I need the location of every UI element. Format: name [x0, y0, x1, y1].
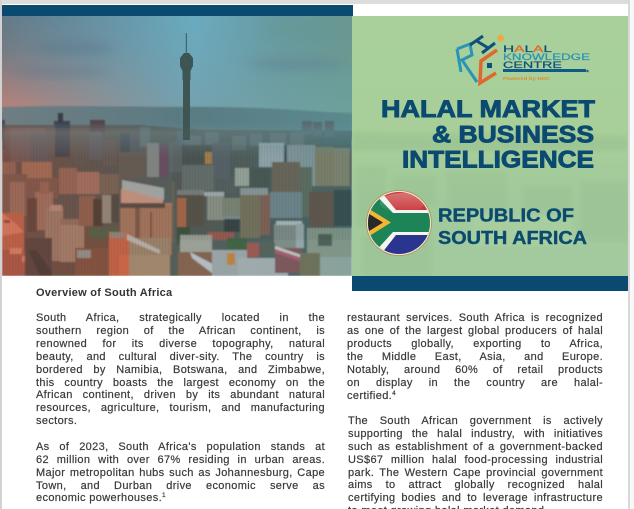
icon: Halal Knowledge Centre logo: Powered by HDC	[503, 76, 551, 81]
icon: Halal Knowledge Centre logo	[456, 34, 590, 86]
heading: Halal Market & Business Intelligence: INTELLIGENCE	[402, 146, 594, 174]
text block: left column: Town, and Durban drive economic serve as	[36, 480, 325, 492]
text block: right column: such as establishment of a government-backed	[348, 440, 603, 452]
bottom navy bar	[352, 276, 628, 291]
icon: South African flag badge	[366, 190, 432, 256]
text block: left column: economic powerhouses.1	[36, 492, 166, 504]
text block: right column: Notably, around 60% of retail products	[347, 364, 603, 376]
windows texture	[2, 135, 352, 276]
text block: left column: renowned for its diverse topography, natural	[36, 338, 325, 350]
text block: left column: sectors.	[36, 415, 77, 427]
text block: left column: this country boasts the largest economy on the	[36, 376, 325, 388]
text block: right column: supporting the halal industry, with initiatives	[348, 428, 603, 440]
text block: left column: beauty, and cultural diver-sity. The country is	[36, 351, 325, 363]
salmon mid rows	[2, 162, 16, 174]
text block: right column: aims to attract globally recognized halal	[348, 479, 603, 491]
distant blocks	[302, 121, 334, 137]
text block: left column: African continent, driven by its abundant natural	[36, 389, 325, 401]
heading: Halal Market & Business Intelligence: HALAL MARKET	[381, 96, 595, 123]
text block: right column: the Middle East, Asia, and Europe.	[347, 350, 603, 362]
panel: green title block	[352, 16, 628, 276]
text block: right column: restaurant services. South Africa is recognized	[347, 312, 603, 324]
text block: left column: 62 million with over 67% residing in urban areas.	[36, 454, 325, 466]
top navy bar	[2, 5, 353, 16]
text block: right column: products globally, exporting to Africa,	[347, 338, 603, 350]
centre upper	[177, 130, 185, 144]
right towers	[259, 143, 284, 167]
text block: left column: South Africa, strategically located in the	[36, 312, 325, 324]
text block: left column: Major metropolitan hubs such as Johannesburg, Cape	[36, 467, 325, 479]
icon: Halal Knowledge Centre logo: KNOWLEDGE	[503, 52, 590, 62]
heading: Overview of South Africa: Overview of South Africa	[36, 287, 172, 299]
text block: left column	[36, 312, 325, 504]
heading: Halal Market & Business Intelligence	[381, 96, 596, 174]
text block: right column: park. The Western Cape provincial government	[348, 466, 603, 478]
text block: left column: southern region of the African continent, is	[36, 325, 325, 337]
right mid	[177, 192, 204, 227]
text block: right column: US$67 million halal food-processing industrial	[348, 454, 603, 466]
central large building	[121, 189, 163, 212]
text block: right column: on display in the country are halal-	[347, 376, 603, 388]
heading: Republic of South Africa: SOUTH AFRICA	[438, 227, 587, 248]
heading: Republic of South Africa: REPUBLIC OF	[438, 204, 574, 226]
text block: right column: as one of the largest global producers of halal	[347, 324, 603, 336]
heading: Halal Market & Business Intelligence: & BUSINESS	[432, 122, 594, 148]
heading: Republic of South Africa	[438, 204, 587, 248]
hills	[2, 106, 352, 140]
bottom left	[2, 213, 24, 251]
colour tint	[2, 128, 352, 276]
towers left	[10, 128, 45, 162]
text block: right column: certified.4	[347, 390, 396, 402]
tower	[180, 33, 193, 140]
icon: Halal Knowledge Centre logo: H A L A L	[503, 44, 552, 54]
text block: left column: As of 2023, South Africa's population stands at	[36, 441, 325, 453]
text block: left column: bordered by Namibia, Botswana, and Zimbabwe,	[36, 364, 325, 376]
text block: right column	[347, 312, 603, 509]
city base	[2, 125, 352, 276]
right lower	[177, 227, 190, 245]
icon: Halal Knowledge Centre logo: CENTRE	[503, 60, 562, 70]
photo: Johannesburg skyline	[2, 16, 352, 276]
text block: right column: certifying bodies and to leverage infrastructure	[348, 492, 603, 504]
text block: right column: The South African government is actively	[348, 415, 603, 427]
sky	[2, 16, 352, 136]
text block: left column: resources, agriculture, tourism, and manufacturing	[36, 402, 325, 414]
